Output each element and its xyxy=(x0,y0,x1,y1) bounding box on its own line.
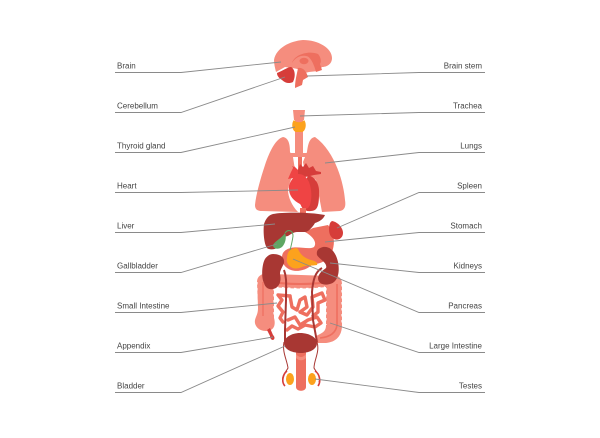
label: Testes: Testes xyxy=(459,382,482,390)
right lung xyxy=(303,137,345,212)
label: Pancreas xyxy=(293,259,485,312)
label: Liver: Liver xyxy=(117,222,135,230)
esophagus xyxy=(300,208,306,226)
label: Stomach xyxy=(325,222,485,242)
lungs xyxy=(255,137,345,212)
brain xyxy=(274,40,332,88)
bladder xyxy=(284,333,317,353)
label: Kidneys: Kidneys xyxy=(454,262,482,270)
large intestine xyxy=(255,273,342,343)
trachea xyxy=(290,110,307,172)
heart xyxy=(288,163,321,211)
small intestine xyxy=(278,293,325,330)
label: Kidneys xyxy=(330,262,485,272)
reproductive system xyxy=(283,342,320,391)
label: Small Intestine: Small Intestine xyxy=(117,302,170,310)
label: Testes xyxy=(315,379,485,392)
label: Large Intestine xyxy=(330,323,485,352)
label: Spleen xyxy=(337,182,485,228)
label: Brain stem xyxy=(307,62,485,76)
label: Large Intestine: Large Intestine xyxy=(429,342,483,350)
stomach xyxy=(282,225,334,271)
label: Heart: Heart xyxy=(117,182,137,190)
spleen xyxy=(329,221,343,240)
label: Trachea xyxy=(300,102,485,116)
label: Lungs xyxy=(325,142,485,163)
thyroid gland xyxy=(292,120,306,132)
label: Spleen: Spleen xyxy=(457,182,482,190)
label: Brain: Brain xyxy=(117,62,136,70)
label: Cerebellum xyxy=(115,77,285,112)
label: Bladder xyxy=(115,346,285,392)
label: Appendix: Appendix xyxy=(117,342,150,350)
label: Pancreas: Pancreas xyxy=(448,302,482,310)
right labels xyxy=(293,62,485,392)
label: Thyroid gland: Thyroid gland xyxy=(117,142,165,150)
left lung xyxy=(255,137,298,212)
appendix xyxy=(267,328,274,340)
label: Trachea: Trachea xyxy=(453,102,483,110)
pancreas xyxy=(287,248,317,268)
label: Liver xyxy=(115,222,275,232)
liver xyxy=(264,213,325,249)
label: Brain stem: Brain stem xyxy=(444,62,482,70)
ureters xyxy=(284,268,322,342)
kidneys xyxy=(262,247,339,342)
brain stem xyxy=(295,68,308,88)
label: Small Intestine xyxy=(115,302,277,312)
cerebellum xyxy=(277,67,295,83)
label: Bladder: Bladder xyxy=(117,382,145,390)
label: Thyroid gland xyxy=(115,127,295,152)
label: Gallbladder: Gallbladder xyxy=(117,262,158,270)
testis left xyxy=(286,373,294,385)
left labels xyxy=(115,62,298,392)
label: Brain xyxy=(115,62,281,72)
label: Lungs: Lungs xyxy=(460,142,482,150)
label: Stomach: Stomach xyxy=(450,222,482,230)
gallbladder xyxy=(273,231,293,258)
label: Cerebellum: Cerebellum xyxy=(117,102,158,110)
label: Appendix xyxy=(115,337,273,352)
testis right xyxy=(308,373,316,385)
label: Gallbladder xyxy=(115,244,277,272)
